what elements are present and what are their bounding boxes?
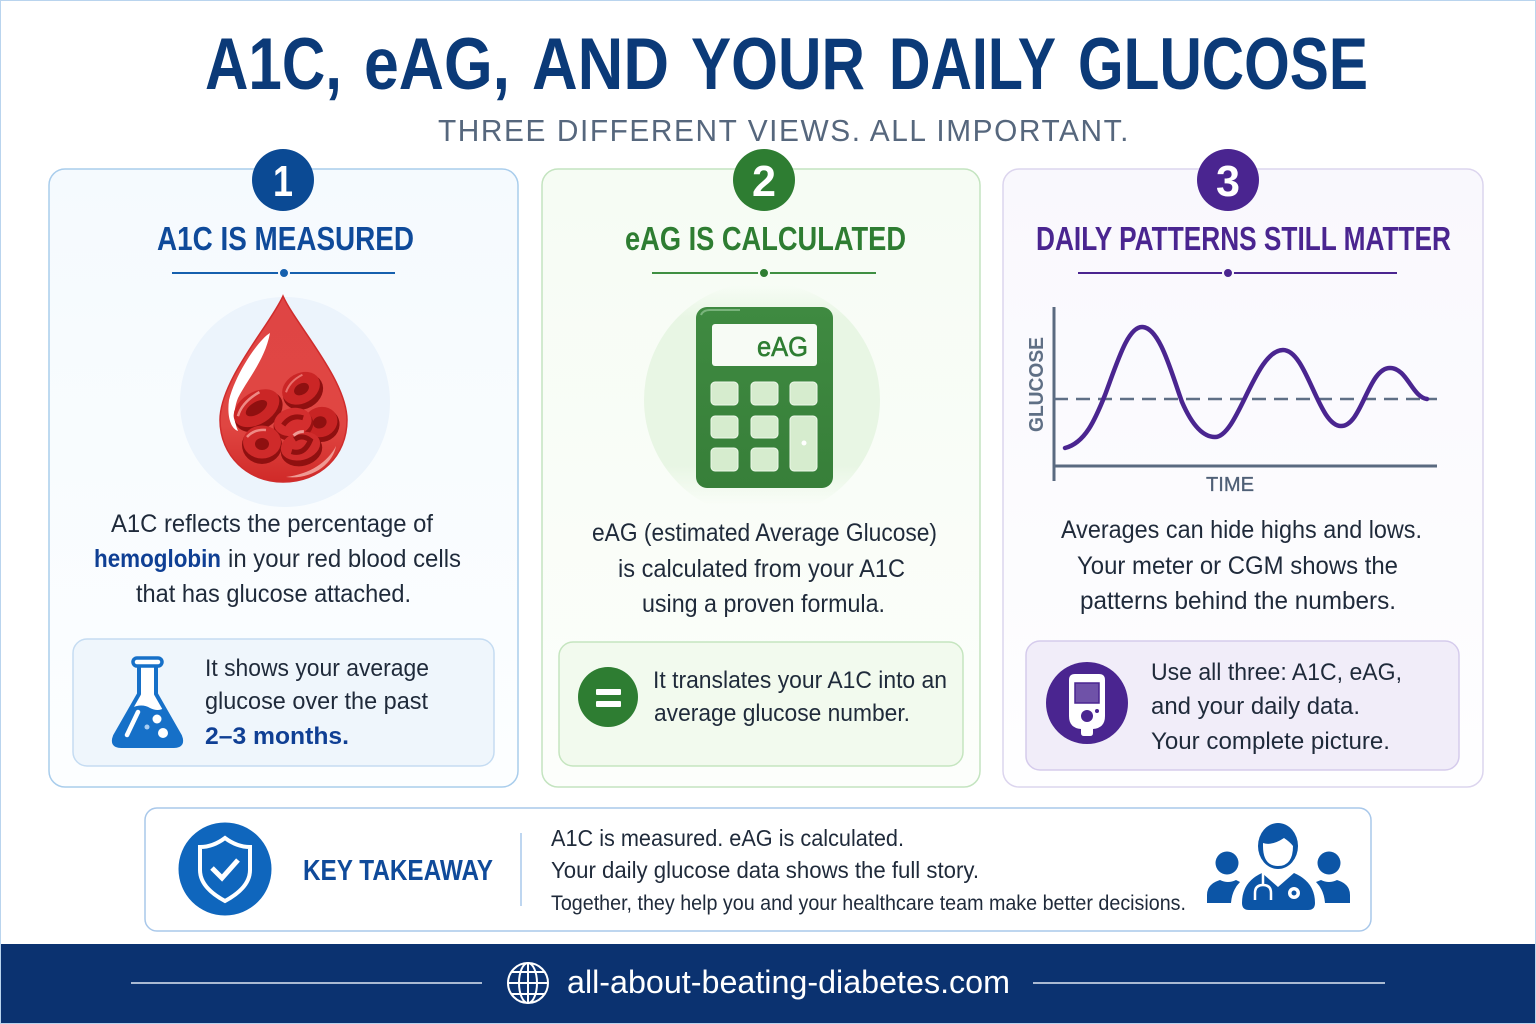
panel: daily patterns still matter [1003, 149, 1483, 787]
callout: average over 2-3 months [73, 639, 494, 766]
callout text: Use all three: A1C, eAG, [1151, 659, 1402, 686]
takeaway text: A1C is measured. eAG is calculated. [551, 825, 904, 851]
number badge 3: 3 [1216, 157, 1240, 206]
callout text: average glucose number. [654, 700, 910, 727]
title [205, 24, 1368, 105]
line chart: glucose over time [1026, 307, 1437, 496]
callout text: Your complete picture. [1151, 728, 1390, 755]
title: AND [532, 24, 669, 105]
number badge 2: 2 [752, 157, 776, 206]
body text: A1C reflects the percentage of [111, 510, 433, 538]
callout text: glucose over the past [205, 688, 428, 715]
title: DAILY [889, 24, 1056, 105]
icon: doctor and patients [1207, 823, 1350, 910]
body text [94, 510, 461, 608]
body text: using a proven formula. [642, 590, 885, 618]
body text: that has glucose attached. [136, 580, 411, 608]
panel: A1C is measured [49, 149, 518, 787]
icon: shield with check [178, 822, 272, 916]
number badge 1: 1 [273, 157, 293, 206]
heading: A1C IS MEASURED [157, 220, 414, 257]
callout text: 2–3 months. [205, 723, 349, 750]
body text: Averages can hide highs and lows. [1061, 516, 1422, 544]
footer bar [1, 944, 1535, 1023]
body text: in your red blood cells [228, 545, 461, 573]
body text: patterns behind the numbers. [1080, 587, 1396, 615]
icon: flask [114, 658, 181, 746]
takeaway text: Your daily glucose data shows the full story. [551, 857, 979, 883]
icon: globe [508, 963, 548, 1003]
takeaway text: Together, they help you and your healthcare team make better decisions. [551, 892, 1186, 915]
callout text [1151, 659, 1402, 755]
subtitle: THREE DIFFERENT VIEWS. ALL IMPORTANT. [438, 114, 1130, 148]
body text: is calculated from your A1C [618, 555, 905, 583]
icon: blood drop with red cells [180, 296, 390, 507]
line chart: glucose over time: TIME [1206, 474, 1254, 496]
body text [592, 519, 937, 618]
takeaway label: KEY TAKEAWAY [303, 855, 493, 887]
callout text: It translates your A1C into an [653, 667, 947, 694]
number badge 3 [1197, 149, 1259, 211]
callout text [205, 655, 429, 750]
body text [1061, 516, 1422, 615]
takeaway text [551, 825, 1186, 915]
line chart: glucose over time: GLUCOSE [1026, 337, 1048, 432]
callout: use all three [1026, 641, 1459, 770]
icon: glucose meter [1046, 662, 1128, 744]
callout: translates A1C [559, 642, 963, 766]
callout text [653, 667, 947, 727]
number badge 2 [733, 149, 795, 211]
panel: key takeaway [145, 808, 1371, 931]
title: YOUR [691, 24, 865, 105]
number badge 1 [252, 149, 314, 211]
title: eAG, [364, 24, 510, 105]
panel: eAG is calculated [542, 149, 980, 787]
callout text: It shows your average [205, 655, 429, 682]
callout text: and your daily data. [1151, 693, 1360, 720]
body text: hemoglobin [94, 545, 221, 573]
icon: calculator [644, 282, 880, 518]
heading: eAG IS CALCULATED [625, 220, 906, 257]
title: GLUCOSE [1078, 24, 1368, 105]
website url: all-about-beating-diabetes.com [567, 964, 1010, 1000]
title: A1C, [205, 24, 342, 105]
icon: equals sign [578, 667, 638, 727]
body text: Your meter or CGM shows the [1077, 552, 1398, 580]
icon: calculator: eAG [757, 331, 808, 362]
body text: eAG (estimated Average Glucose) [592, 519, 937, 547]
